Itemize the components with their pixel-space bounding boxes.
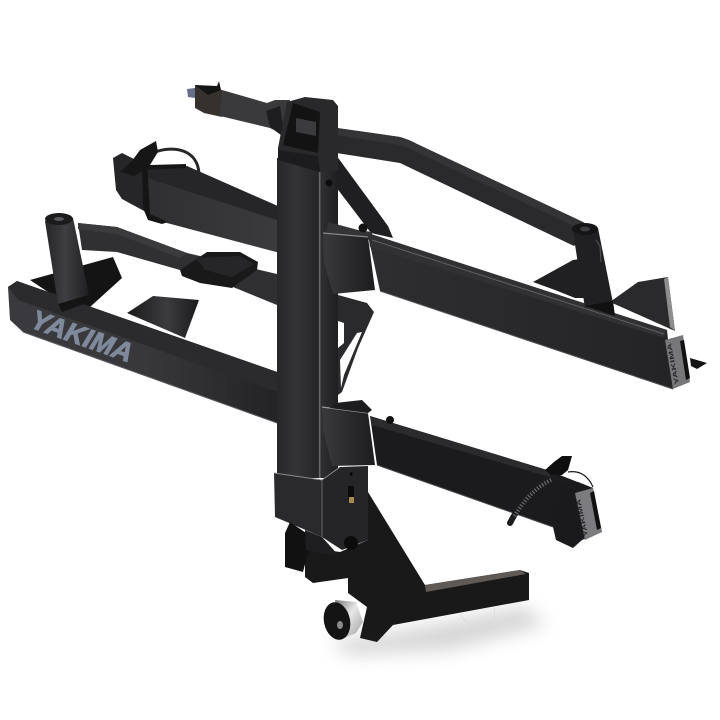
thin wire — [568, 472, 593, 487]
cap slot — [590, 491, 601, 530]
plate upper — [322, 466, 368, 550]
brass pin — [349, 497, 354, 503]
adjustment slot — [348, 486, 354, 500]
lower right rail — [322, 400, 602, 548]
top band — [8, 281, 280, 393]
silver cylinder — [335, 600, 363, 640]
right wheel post — [572, 223, 615, 316]
bottom edge highlight — [23, 332, 280, 424]
strap tip — [690, 358, 707, 369]
rail top band — [147, 166, 280, 221]
logo text: YAKIMA — [27, 304, 137, 368]
post body — [277, 158, 338, 478]
right tray right wing — [610, 277, 675, 331]
ratchet — [545, 456, 572, 476]
wheel face — [320, 600, 354, 642]
hitch mount assembly — [274, 466, 529, 642]
central upright post — [277, 97, 338, 478]
cap slot — [680, 340, 690, 380]
end cap — [575, 488, 602, 540]
cap lettering: YAKIMA — [576, 497, 590, 537]
rail side — [368, 235, 673, 389]
collar — [323, 233, 375, 294]
bracket top — [326, 222, 372, 240]
diagonal brace — [336, 155, 393, 238]
knob — [344, 536, 358, 550]
dangling wire — [460, 608, 495, 630]
rail body — [370, 416, 593, 540]
rail side face — [142, 165, 280, 253]
upper right rail — [323, 222, 707, 389]
ladder strap — [510, 477, 555, 523]
top cap — [278, 97, 338, 172]
arm tube — [78, 223, 277, 305]
ratchet — [120, 141, 186, 176]
roller wheel — [320, 600, 363, 642]
latch — [285, 522, 312, 572]
right tray left wing — [533, 258, 590, 298]
hitch tube and gusset — [305, 492, 529, 642]
cap lettering: YAKIMA — [667, 341, 681, 385]
collar — [322, 407, 375, 466]
lower folding bracket — [338, 295, 374, 395]
end cap — [113, 153, 146, 212]
left tray near wing — [127, 296, 199, 338]
rail top band — [368, 233, 667, 338]
hitch tube top face — [425, 570, 526, 592]
left wheel post — [45, 213, 95, 312]
end block — [553, 482, 602, 548]
side face — [8, 281, 280, 424]
end cap — [665, 335, 690, 389]
ground shadow — [330, 606, 545, 655]
sleeve — [274, 473, 322, 537]
sleeve lower wedge — [305, 530, 340, 557]
plate hole — [350, 472, 352, 476]
lower left arm — [78, 223, 277, 305]
hub — [337, 621, 343, 629]
bottom left rail — [8, 281, 280, 424]
upper left rail — [113, 141, 280, 253]
top arm left tip — [187, 81, 290, 138]
clamp — [180, 252, 258, 288]
left tray far wing — [30, 257, 122, 307]
top arm right section — [330, 127, 592, 246]
bolts — [326, 180, 332, 186]
strap loop — [155, 149, 199, 174]
rear upper arm assembly — [187, 81, 675, 331]
